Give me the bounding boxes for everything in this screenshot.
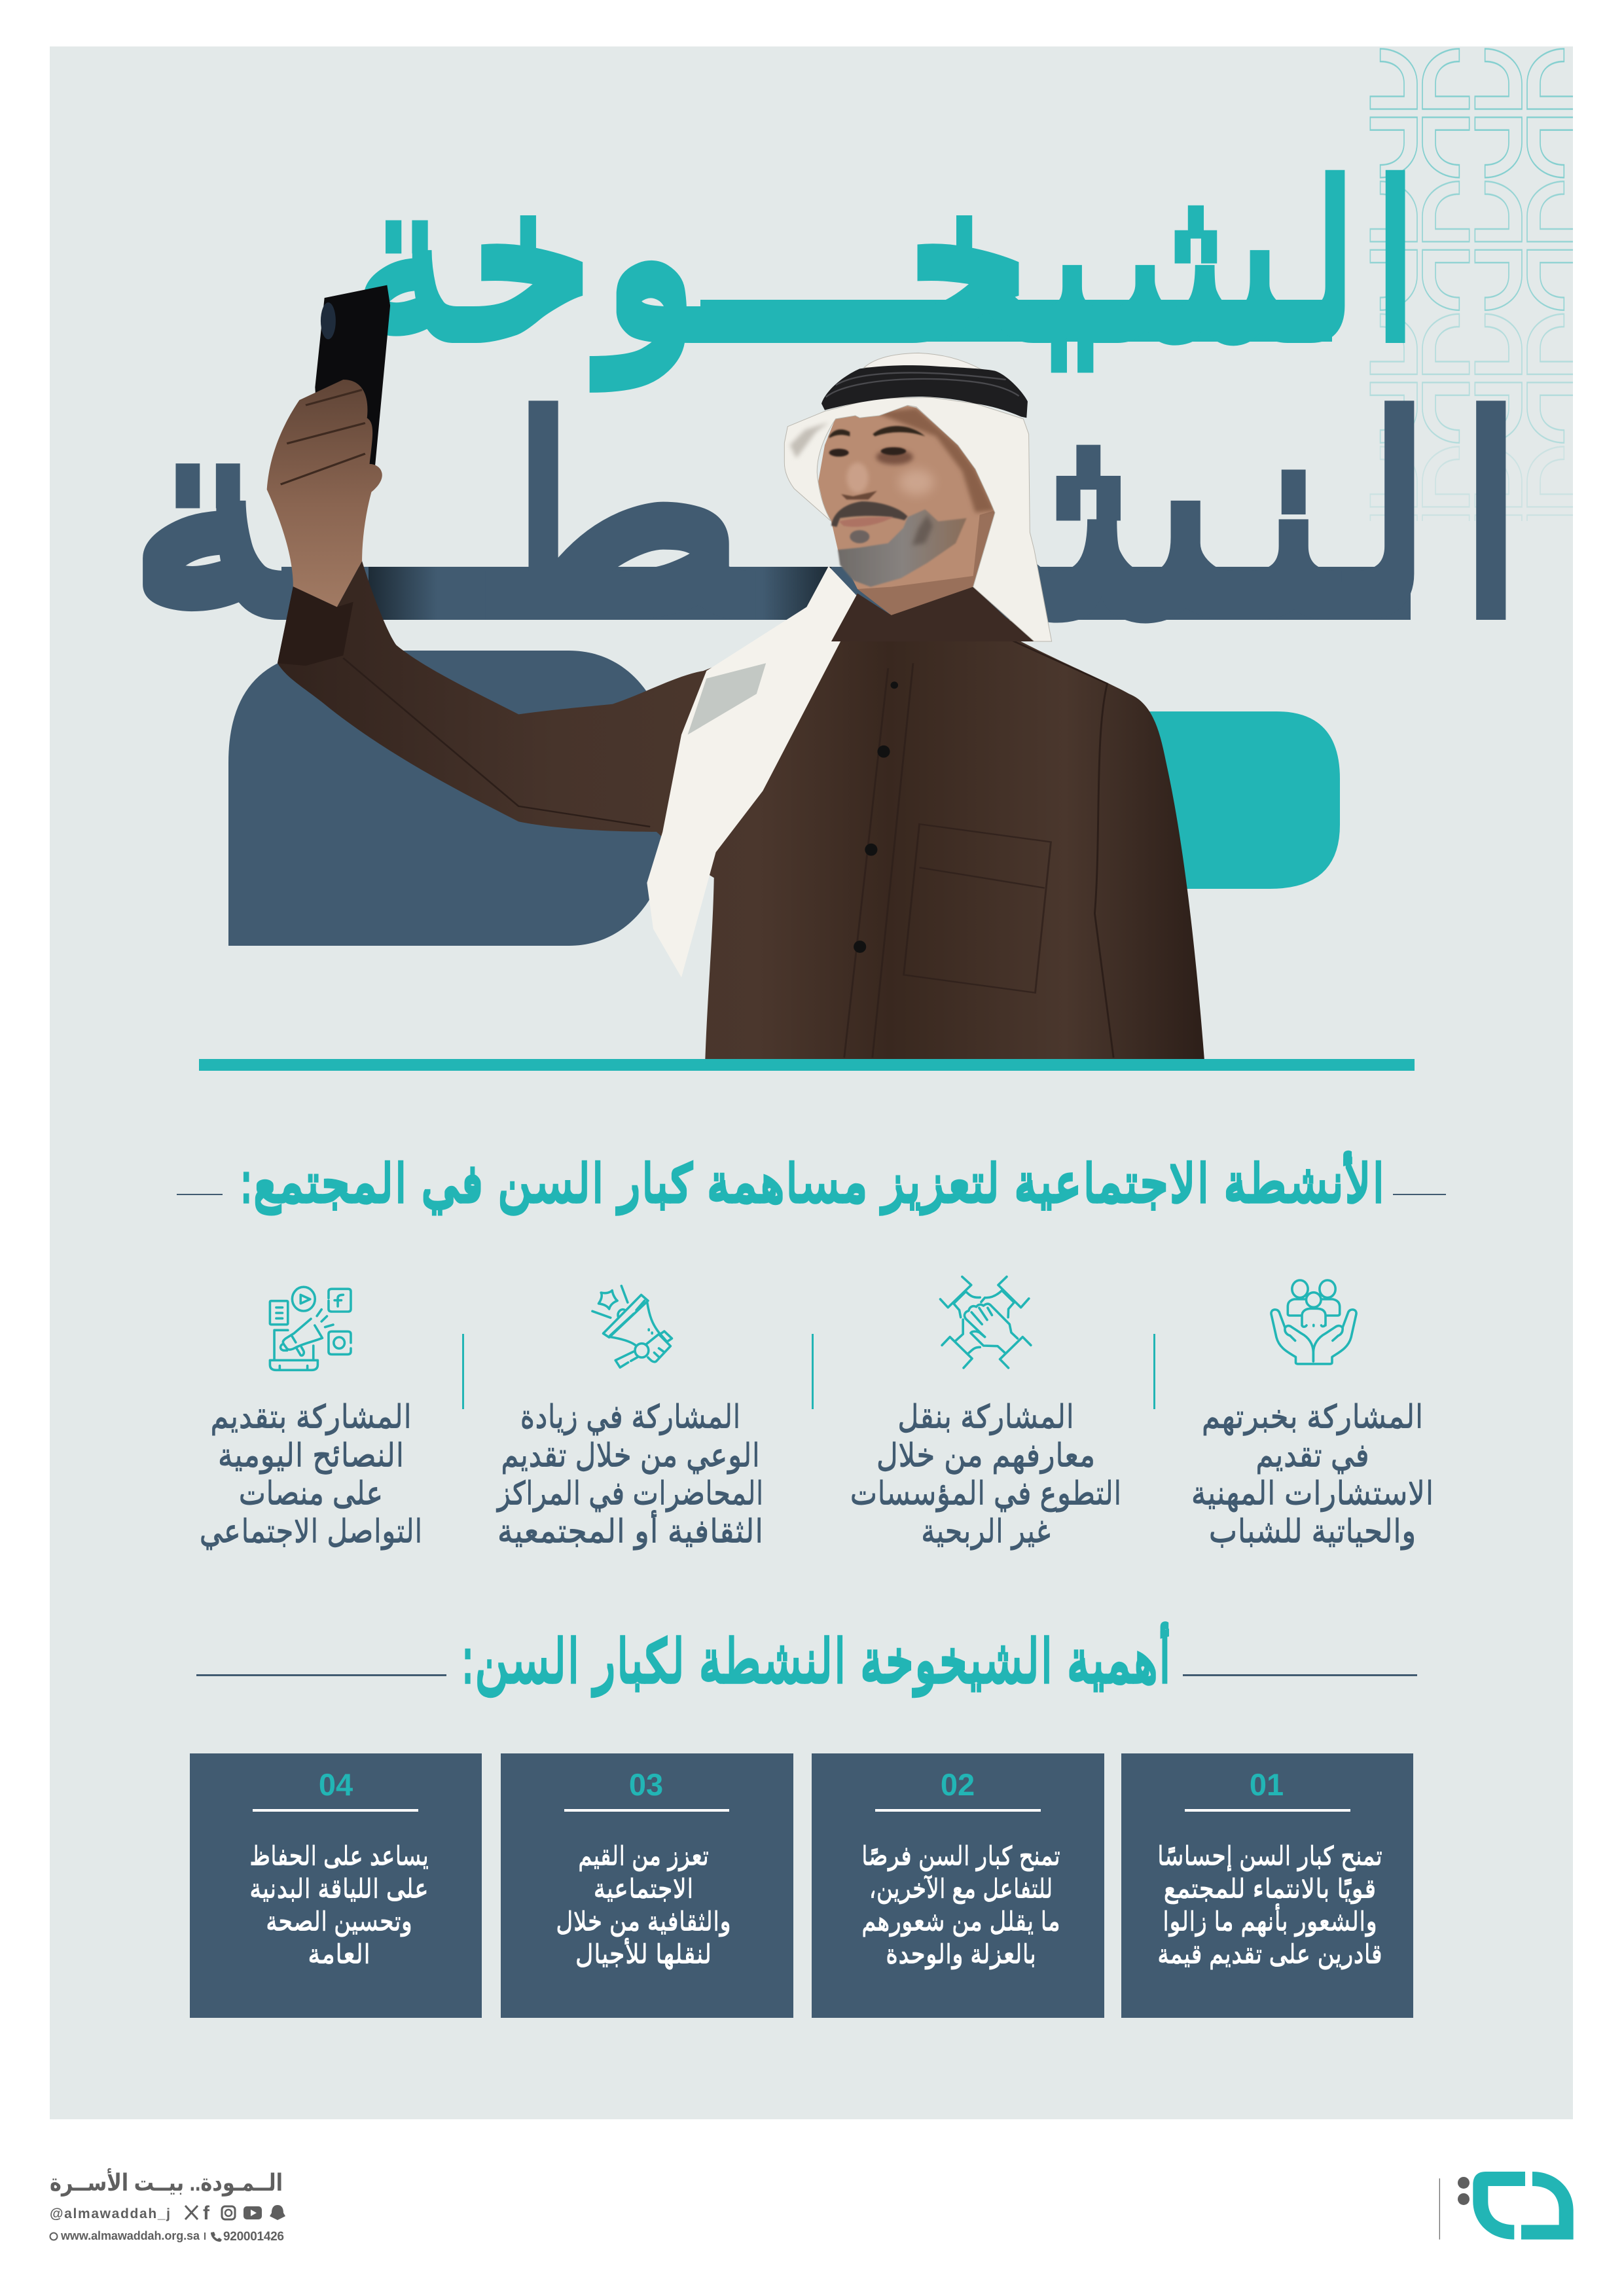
card 04: وتحسين الصحة — [266, 1908, 412, 1937]
text: column 1 — [1191, 1400, 1434, 1550]
text: column 1: الاستشارات المهنية — [1191, 1477, 1434, 1512]
icon: megaphone with sparkle — [592, 1286, 672, 1367]
card 04: على اللياقة البدنية — [249, 1875, 429, 1903]
heading text: الأنشطة الاجتماعية لتعزيز مساهمة كبار السن في المجتمع: — [240, 1153, 1385, 1213]
heading: importance — [196, 1624, 1417, 1696]
man: beard — [838, 509, 967, 587]
heading rule left — [196, 1674, 446, 1676]
text: column 3: الثقافية أو المجتمعية — [497, 1511, 763, 1550]
man: cheek highlight — [899, 469, 934, 495]
man: nose highlight — [846, 463, 869, 493]
man: beard dark streak — [912, 515, 933, 545]
text: column 4 — [199, 1400, 423, 1550]
card 03: الاجتماعية — [593, 1875, 694, 1903]
text: column 3: المشاركة في زيادة — [520, 1400, 741, 1435]
card 02 — [812, 1753, 1104, 2018]
card 03: تعزز من القيم — [578, 1842, 709, 1871]
man: nose shadow — [841, 491, 877, 499]
man: fingers — [281, 390, 365, 484]
footer: social icons: f — [203, 2202, 210, 2224]
footer: logo — [1439, 2172, 1574, 2240]
icon: hands holding people — [1271, 1280, 1356, 1364]
text: column 2: التطوع في المؤسسات — [850, 1477, 1122, 1512]
card 01: والشعور بأنهم ما زالوا — [1163, 1904, 1377, 1937]
man: collar — [831, 587, 1039, 641]
man: scarf embroidery — [688, 663, 766, 735]
icon: social media and megaphone — [270, 1287, 351, 1370]
man: ghutra shading — [790, 422, 829, 458]
text: column 1: المشاركة بخبرتهم — [1202, 1400, 1423, 1435]
text: column 3: المحاضرات في المراكز — [496, 1477, 763, 1512]
text: column 2: المشاركة بنقل — [897, 1400, 1074, 1435]
man: moustache — [831, 501, 908, 527]
man: agal — [821, 365, 1028, 418]
text: column 3 — [496, 1400, 763, 1550]
card 04 — [190, 1753, 482, 2018]
logo mark — [1473, 2172, 1574, 2240]
text: column 4: على منصات — [238, 1477, 384, 1511]
heading rule right — [1393, 1194, 1446, 1195]
column dividers — [462, 1334, 1155, 1409]
title line 1 baseline band — [700, 300, 1332, 342]
heading rule left — [177, 1194, 223, 1195]
heading text: أهمية الشيخوخة النشطة لكبار السن: — [461, 1624, 1172, 1696]
shadow on title bar near the scarf — [763, 567, 831, 620]
text: column 4: النصائح اليومية — [217, 1439, 405, 1474]
card 01: قادرين على تقديم قيمة — [1157, 1941, 1382, 1969]
man: eye sockets — [876, 450, 913, 465]
decorative tile pattern — [1369, 48, 1573, 521]
text: column 1: في تقديم — [1255, 1439, 1369, 1474]
card 01: 01 — [1250, 1767, 1284, 1802]
title line 2 baseline band — [281, 567, 1411, 620]
text: column 2: معارفهم من خلال — [876, 1439, 1096, 1474]
man: cuff — [278, 586, 353, 666]
text: column 2: غير الربحية — [921, 1515, 1051, 1550]
man: upper shadow — [875, 408, 995, 512]
card 03 — [501, 1753, 793, 2018]
man: eyebrows — [829, 426, 925, 438]
title line 2: النشــطــة — [119, 378, 1537, 661]
shape: blue rounded block — [228, 651, 674, 946]
man: ghutra — [784, 397, 1052, 641]
card 03: 03 — [629, 1767, 663, 1802]
photo: man taking a selfie — [267, 285, 1204, 1059]
man: body — [267, 285, 1204, 1059]
card 02: تمنح كبار السن فرصًا — [861, 1842, 1060, 1871]
man: eyes — [829, 447, 906, 457]
footer: social icons — [185, 2202, 285, 2224]
card 04: 04 — [319, 1767, 353, 1802]
man: soul patch — [850, 530, 869, 543]
card 02: 02 — [941, 1767, 975, 1802]
footer: website and phone — [50, 2229, 284, 2244]
man: face — [818, 406, 995, 589]
card 03: لنقلها للأجيال — [575, 1938, 712, 1969]
man: phone — [315, 285, 390, 492]
man: neck — [857, 506, 997, 615]
logo dots — [1458, 2177, 1470, 2205]
text: column 1: والحياتية للشباب — [1208, 1515, 1416, 1550]
man: ghutra top — [864, 353, 982, 370]
logo divider — [1439, 2178, 1440, 2240]
card 02: للتفاعل مع الآخرين، — [869, 1874, 1053, 1904]
man: lips — [839, 517, 893, 527]
man: robe — [278, 561, 1204, 1059]
footer: social handle: @almawaddah_j — [50, 2206, 170, 2221]
man: scarf tail — [647, 566, 857, 977]
teal divider bar — [199, 1059, 1415, 1071]
text: column 3: الوعي من خلال تقديم — [501, 1439, 760, 1474]
man: phone camera — [321, 302, 336, 339]
shape: teal rounded block — [1113, 711, 1340, 889]
card 04: العامة — [308, 1941, 370, 1969]
card 03: والثقافية من خلال — [556, 1908, 731, 1937]
footer: tagline: الــمـودة.. بيــت الأســرة — [50, 2168, 283, 2197]
card 02: ما يقلل من شعورهم — [861, 1908, 1060, 1937]
card 01: تمنح كبار السن إحساسًا — [1157, 1842, 1382, 1871]
title line 1: الشيخـــوخة — [348, 149, 1426, 385]
card 01: قويًا بالانتماء للمجتمع — [1164, 1875, 1376, 1904]
man: buttons — [854, 681, 898, 953]
card 02: بالعزلة والوحدة — [886, 1941, 1036, 1969]
footer: website and phone: 920001426 — [223, 2230, 284, 2244]
card 01 — [1121, 1753, 1413, 2018]
heading rule right — [1183, 1674, 1417, 1676]
text: column 4: التواصل الاجتماعي — [199, 1515, 423, 1550]
man: agal stripes — [826, 372, 1019, 397]
man: robe details — [343, 632, 1113, 1058]
icon: hands clasped — [940, 1277, 1031, 1368]
man: head — [784, 353, 1052, 641]
man: hand — [267, 380, 382, 607]
card 04: يساعد على الحفاظ — [249, 1842, 429, 1871]
text: column 4: المشاركة بتقديم — [210, 1400, 412, 1435]
text: column 2 — [850, 1400, 1122, 1550]
footer: website and phone: www.almawaddah.org.sa — [60, 2229, 200, 2242]
shadow on title bar near the arm — [369, 567, 437, 620]
